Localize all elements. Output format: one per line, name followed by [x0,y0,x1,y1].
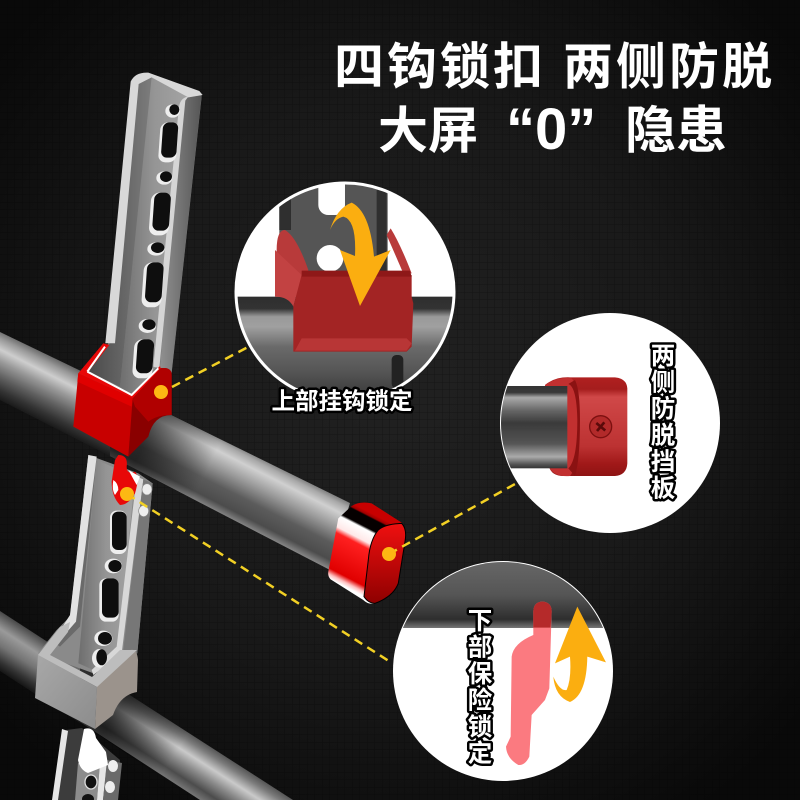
label: lower safety lock: 定 [468,740,492,768]
label: side stopper: 板 [651,474,675,502]
red lower safety hook [112,455,140,505]
title [334,39,772,162]
arrow: downward curved [330,203,391,306]
label: side stopper: 侧 [651,368,675,396]
end cap [328,502,406,604]
upper horizontal tube [0,332,350,570]
detail circle: top hook [230,173,463,414]
screw [590,416,612,438]
rail rivets [139,484,152,517]
detail circle: side stopper [480,313,720,533]
rail holes [132,104,180,378]
detail circle: lower safety lock [390,555,620,781]
dashed connector: top hook [172,346,250,387]
lower rail with slots [38,455,153,675]
label: side stopper: 防 [651,395,675,423]
label: side stopper: 脱 [651,422,676,450]
red top hook bracket [73,343,172,457]
label: side stopper: 两 [651,343,675,370]
label: lower safety lock: 部 [468,634,492,662]
title: 大屏 [378,103,478,159]
title: “0” [506,97,596,162]
dashed connector: side cap [389,484,515,554]
grey lower hook bracket [35,622,138,729]
label: lower safety lock: 锁 [468,713,493,741]
label: lower safety lock: 下 [468,608,492,635]
arrow: upward curved [553,607,606,702]
lower rail holes [92,511,127,668]
marker dots [120,385,396,561]
label: top hook lock: 上部挂钩锁定 [272,388,412,414]
label: side stopper: 挡 [651,448,675,476]
bottom rail segment [52,728,122,800]
label: lower safety lock: 保 [468,660,493,688]
lower horizontal tube [0,611,293,800]
dashed connector: lower hook [127,494,392,663]
title: 四钩锁扣 两侧防脱 [334,39,772,95]
title: 隐患 [625,102,727,159]
label: lower safety lock: 险 [468,686,493,714]
upper rail with slots [88,73,203,397]
